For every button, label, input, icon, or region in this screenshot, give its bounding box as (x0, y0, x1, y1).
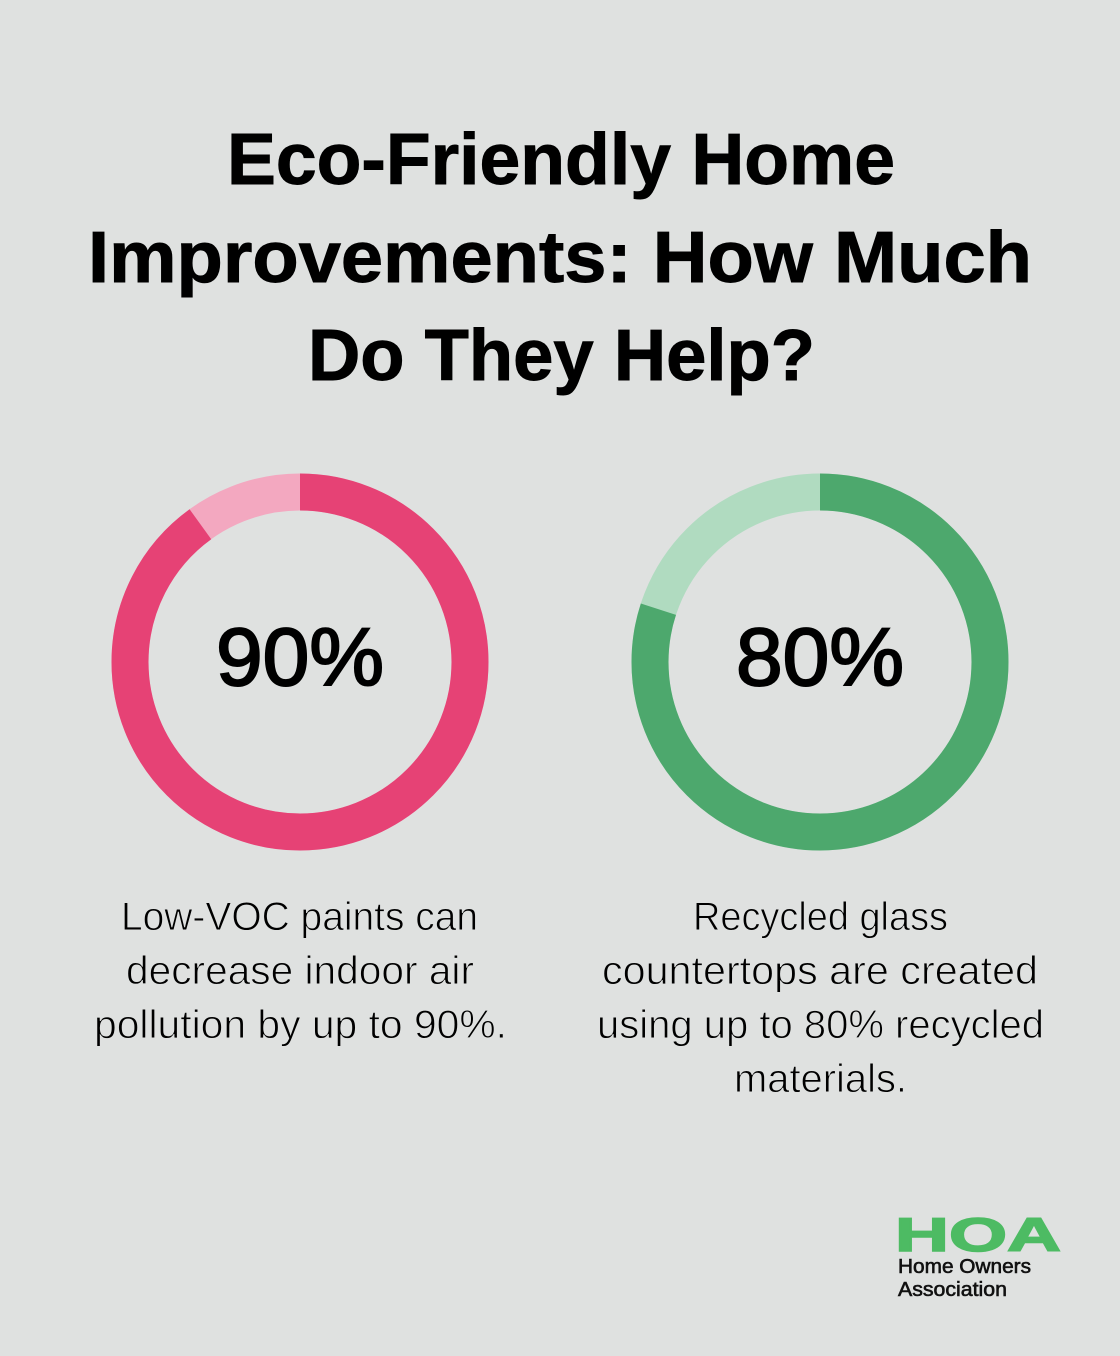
description: recycled glass countertops: countertops are created (602, 949, 1038, 993)
description: low-VOC paints: decrease indoor air (126, 949, 474, 993)
title: Improvements: How Much (88, 218, 1032, 298)
description: recycled glass countertops: using up to 80% recycled (597, 1003, 1044, 1047)
logo: HOA Home Owners Association (895, 1208, 1061, 1301)
description: recycled glass countertops: Recycled glass (693, 895, 948, 939)
description: recycled glass countertops: materials. (734, 1057, 907, 1101)
logo: HOA Home Owners Association: HOA (895, 1208, 1061, 1261)
donut chart: 90% (130, 492, 470, 832)
logo: HOA Home Owners Association: Association (898, 1279, 1007, 1301)
panel: recycled glass countertops (597, 492, 1044, 1101)
description: low-VOC paints: Low-VOC paints can (121, 895, 478, 939)
stat: 90%: 90% (216, 612, 384, 703)
logo: HOA Home Owners Association: Home Owners (898, 1256, 1031, 1278)
panel: low-VOC paints (94, 492, 507, 1047)
title (88, 120, 1032, 396)
donut chart: 80% (650, 492, 990, 832)
stat: 80%: 80% (736, 612, 904, 703)
description: recycled glass countertops (597, 895, 1044, 1101)
description: low-VOC paints: pollution by up to 90%. (94, 1003, 507, 1047)
description: low-VOC paints (94, 895, 507, 1047)
title: Do They Help? (308, 316, 815, 396)
title: Eco-Friendly Home (227, 120, 895, 200)
